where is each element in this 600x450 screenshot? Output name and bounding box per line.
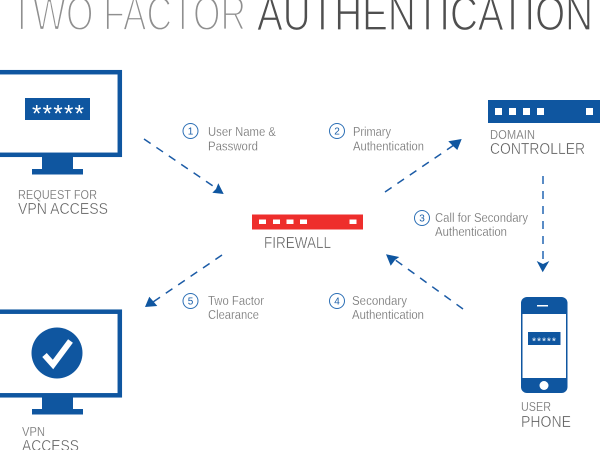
step 5 label: 5 [188,296,194,308]
arrow: step 5 [145,255,222,307]
label: user phone [521,400,571,431]
step 1 label [183,124,277,154]
label: VPN access [22,425,79,450]
step 4 label: 4 [334,296,340,308]
label: request for VPN access [18,188,108,218]
step 4 label [330,294,424,322]
step 2 label: 2 [334,126,340,138]
arrow: step 4 [386,254,463,309]
label: request for VPN access: VPN ACCESS [18,201,108,218]
step 5 label [183,294,264,322]
label: VPN access: VPN [22,425,45,439]
arrow: step 1 [144,139,224,194]
icon: user phone: ***** [532,336,556,348]
icon: user phone [521,297,568,393]
step 2 label: Authentication [353,140,424,154]
step 4 label: Secondary [352,294,408,308]
title [11,0,593,41]
label: user phone: PHONE [521,414,571,431]
arrow: step 2 [385,139,462,192]
icon: access monitor [0,312,120,414]
step 3 label: Call for Secondary [435,211,529,225]
step 2 label [330,124,424,154]
icon: domain controller [488,100,600,123]
step 4 label: Authentication [352,308,424,322]
step 1 label: User Name & [208,125,277,139]
step 2 label: Primary [353,125,392,139]
label: domain controller [490,128,585,158]
label: firewall: FIREWALL [264,235,331,252]
label: domain controller: CONTROLLER [490,141,585,158]
step 3 label: Authentication [435,225,507,239]
icon: firewall [252,214,363,230]
step 5 label: Two Factor [208,294,264,308]
icon: request monitor [0,72,120,174]
step 1 label: 1 [188,126,194,138]
label: request for VPN access: REQUEST FOR [18,188,97,202]
icon: request monitor: ***** [32,100,84,128]
label: user phone: USER [521,400,551,414]
label: domain controller: DOMAIN [490,128,535,142]
step 3 label [414,210,529,239]
step 3 label: 3 [419,214,425,224]
step 5 label: Clearance [208,308,259,322]
arrow: step 3 [537,176,549,272]
step 1 label: Password [208,140,258,154]
